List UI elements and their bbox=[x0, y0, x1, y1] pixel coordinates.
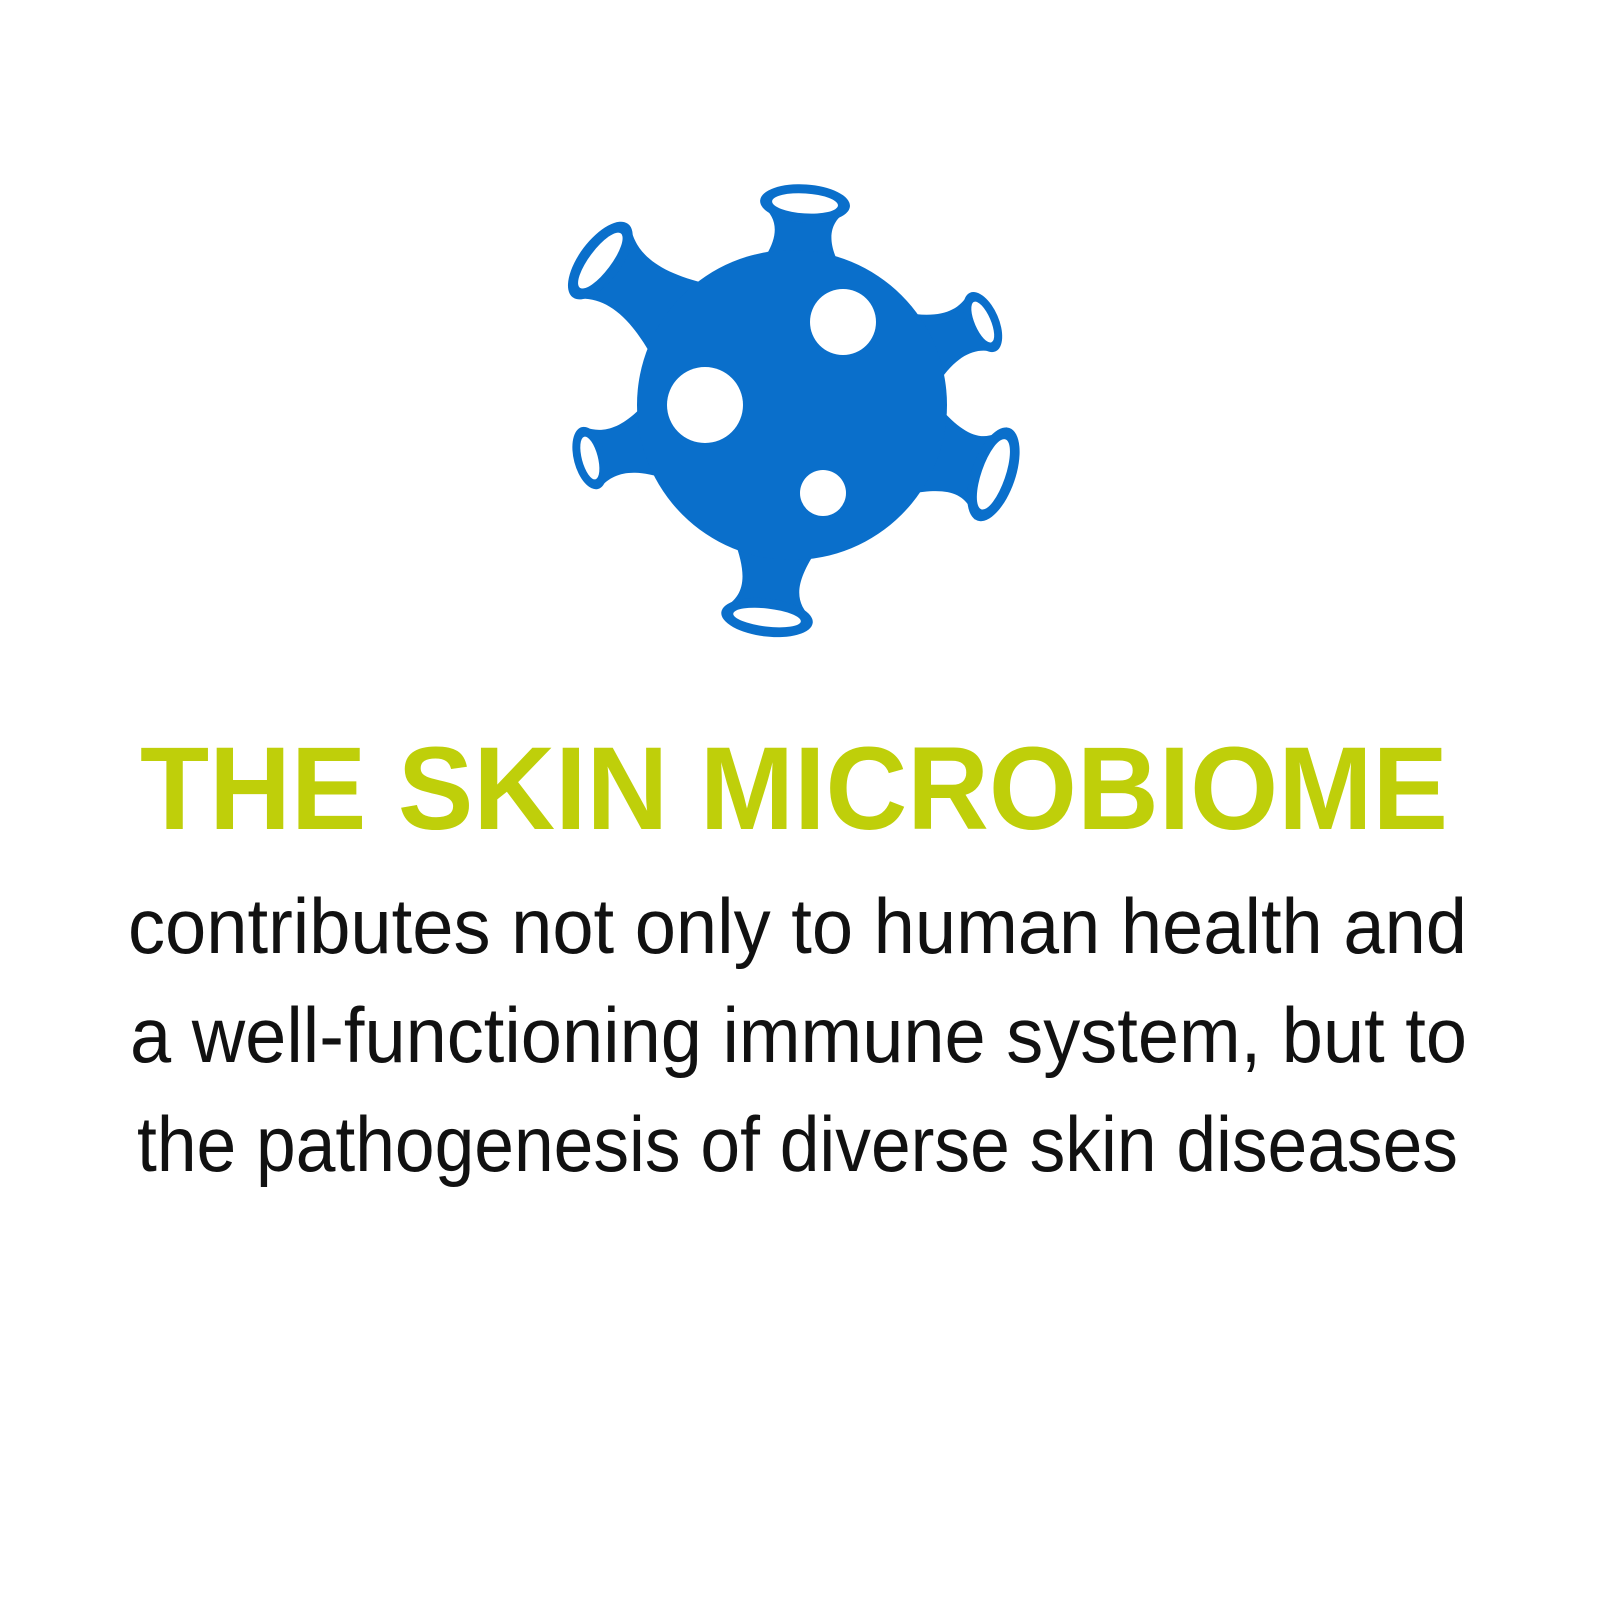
body text: contributes not only to human health and bbox=[128, 882, 1467, 970]
spike top bbox=[756, 182, 851, 268]
holes bbox=[667, 289, 876, 516]
body text bbox=[128, 882, 1467, 1188]
spike bottom bbox=[719, 539, 821, 642]
spike right lower bbox=[908, 404, 1030, 528]
icon: virus bbox=[556, 182, 1030, 642]
virus body bbox=[637, 250, 947, 560]
body text: a well-functioning immune system, but to bbox=[130, 991, 1467, 1079]
spike right upper bbox=[904, 279, 1013, 386]
body text: the pathogenesis of diverse skin diseases bbox=[137, 1100, 1458, 1188]
spike upper-left bbox=[556, 211, 708, 357]
spike left bbox=[564, 402, 667, 501]
title: THE SKIN MICROBIOME bbox=[140, 723, 1448, 855]
